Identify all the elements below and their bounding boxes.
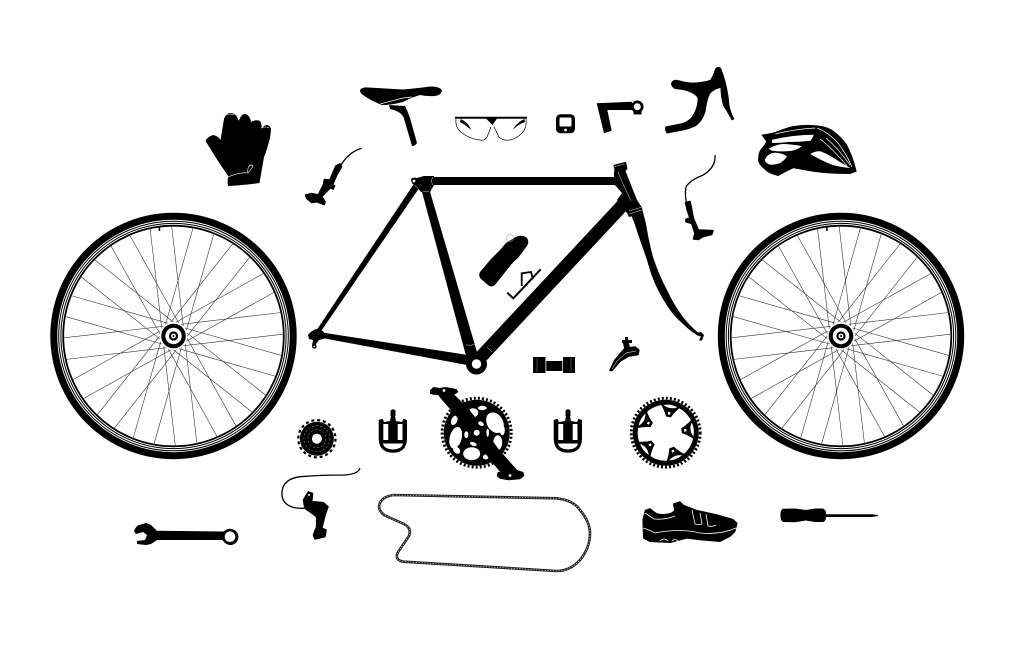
chainring mounting tabs	[635, 403, 695, 463]
left wheel	[54, 216, 293, 456]
stem	[597, 100, 644, 133]
seat lug	[411, 176, 434, 192]
handlebar	[665, 67, 734, 134]
helmet	[758, 125, 857, 176]
bottom bracket cartridge	[533, 357, 575, 373]
glove	[206, 113, 271, 186]
wrench	[134, 523, 238, 545]
fork	[631, 212, 704, 340]
right pedal	[554, 409, 582, 453]
bike computer	[556, 114, 575, 133]
crank arm	[430, 387, 524, 480]
bottle cage	[507, 269, 541, 298]
crank spider windows	[447, 406, 507, 460]
chain stay	[322, 332, 468, 365]
cycling shoe	[643, 502, 737, 542]
seat post	[389, 105, 417, 146]
bicycle frame	[308, 162, 704, 374]
right wheel	[721, 216, 961, 456]
down tube	[477, 200, 628, 361]
helmet vents	[765, 135, 850, 168]
left brake caliper	[306, 148, 362, 204]
head tube and headset	[613, 162, 643, 217]
sunglasses	[455, 118, 527, 140]
chainring	[631, 398, 700, 467]
top tube	[430, 177, 618, 185]
chain	[379, 495, 590, 571]
rear dropout	[308, 329, 327, 349]
left pedal	[379, 409, 407, 453]
bottom bracket shell	[466, 354, 487, 374]
front derailleur	[610, 337, 639, 370]
saddle	[360, 86, 442, 146]
cassette	[298, 420, 336, 457]
crankset	[430, 387, 524, 480]
frame lug highlights	[423, 164, 642, 352]
seat tube	[422, 190, 477, 354]
seat stay	[317, 184, 418, 332]
right brake caliper	[685, 155, 715, 240]
screwdriver	[780, 508, 878, 522]
water bottle	[479, 234, 528, 286]
rear derailleur	[282, 468, 360, 539]
